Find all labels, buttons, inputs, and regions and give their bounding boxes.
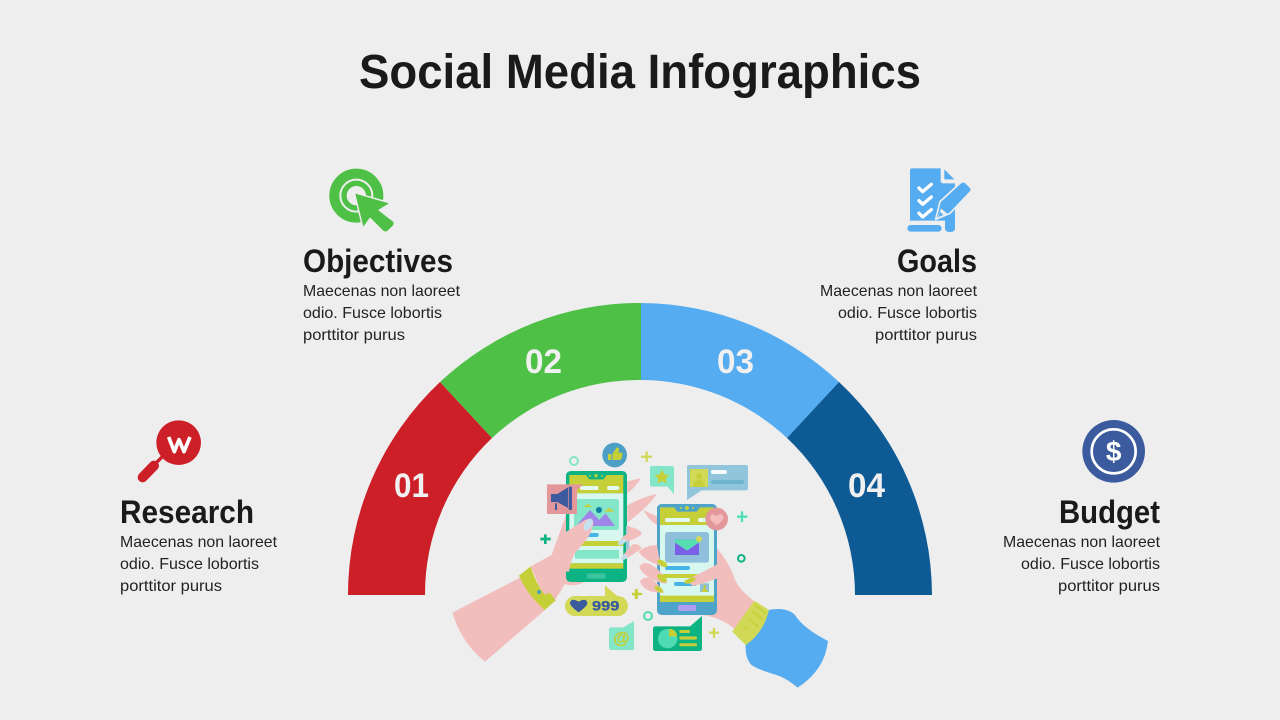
plus decoration [540,534,551,544]
star bubble [650,466,674,494]
segment 02 green: 02 [525,343,562,381]
icon: megaphone bubble [547,484,583,514]
icon: dollar coin [1082,420,1145,483]
item: goals [820,168,978,344]
fingers over phone [638,545,717,593]
phone 2 [657,504,717,615]
left hand and phone [452,443,640,662]
icon: target cursor [334,174,394,232]
heading: Research [120,494,254,530]
segment 01 red [348,382,492,595]
plus decoration [632,589,640,599]
right arm sleeve [746,609,828,688]
profile bubble [687,465,748,500]
description: Maecenas non laoreet [820,283,978,300]
ring decoration [570,457,578,465]
description [303,283,461,344]
description: odio. Fusce lobortis [120,556,259,573]
icon: dollar coin: $ [1106,436,1122,467]
like counter bubble [565,585,628,616]
description [820,283,978,344]
right cuff [732,601,769,645]
at-sign bubble: @ [613,629,629,648]
segment 04 dark blue: 04 [848,467,885,505]
finger edges on phone [626,526,629,557]
fingers [618,478,657,559]
item: objectives [303,174,461,344]
description: Maecenas non laoreet [120,534,278,551]
description: porttitor purus [120,578,222,595]
cuff button [537,590,541,594]
item: budget [1003,420,1161,595]
icon: thumbs up [602,443,627,467]
segment 03 light blue [641,303,839,438]
segment 01 red: 01 [394,467,429,505]
heading: Goals [897,243,977,279]
icon: checklist and pencil [907,168,971,232]
heading: Objectives [303,243,453,279]
nails [617,538,629,561]
left hand fingers [617,478,657,561]
finger behind phone [643,510,657,525]
plus and ring decorations [632,451,747,638]
heading: Budget [1059,494,1160,530]
description: odio. Fusce lobortis [303,305,442,322]
description: porttitor purus [1058,578,1160,595]
title: Social Media Infographics [359,46,921,99]
segment 03 light blue: 03 [717,343,754,381]
illustration: hands holding phones [452,443,828,688]
item: research [120,420,278,595]
arm [452,578,545,662]
segment 02 green [440,303,641,438]
description: odio. Fusce lobortis [838,305,977,322]
thumb [563,519,593,572]
description: Maecenas non laoreet [303,283,461,300]
icon: magnifier [143,420,201,477]
cuff [519,566,556,610]
description [1003,534,1161,595]
finger nails [654,558,696,594]
description: odio. Fusce lobortis [1021,556,1160,573]
hand behind phone [531,513,593,600]
semicircle gauge [348,303,932,595]
description [120,534,278,595]
heart badge [705,508,728,530]
description: porttitor purus [875,327,977,344]
like counter bubble: 999 [592,598,620,614]
at-sign bubble [609,621,634,650]
phone 1 [566,471,627,582]
description: Maecenas non laoreet [1003,534,1161,551]
segment 04 dark blue [787,382,932,595]
chart bubble [653,616,702,651]
right hand [703,548,755,630]
description: porttitor purus [303,327,405,344]
right hand, phone and bubbles [632,451,828,688]
